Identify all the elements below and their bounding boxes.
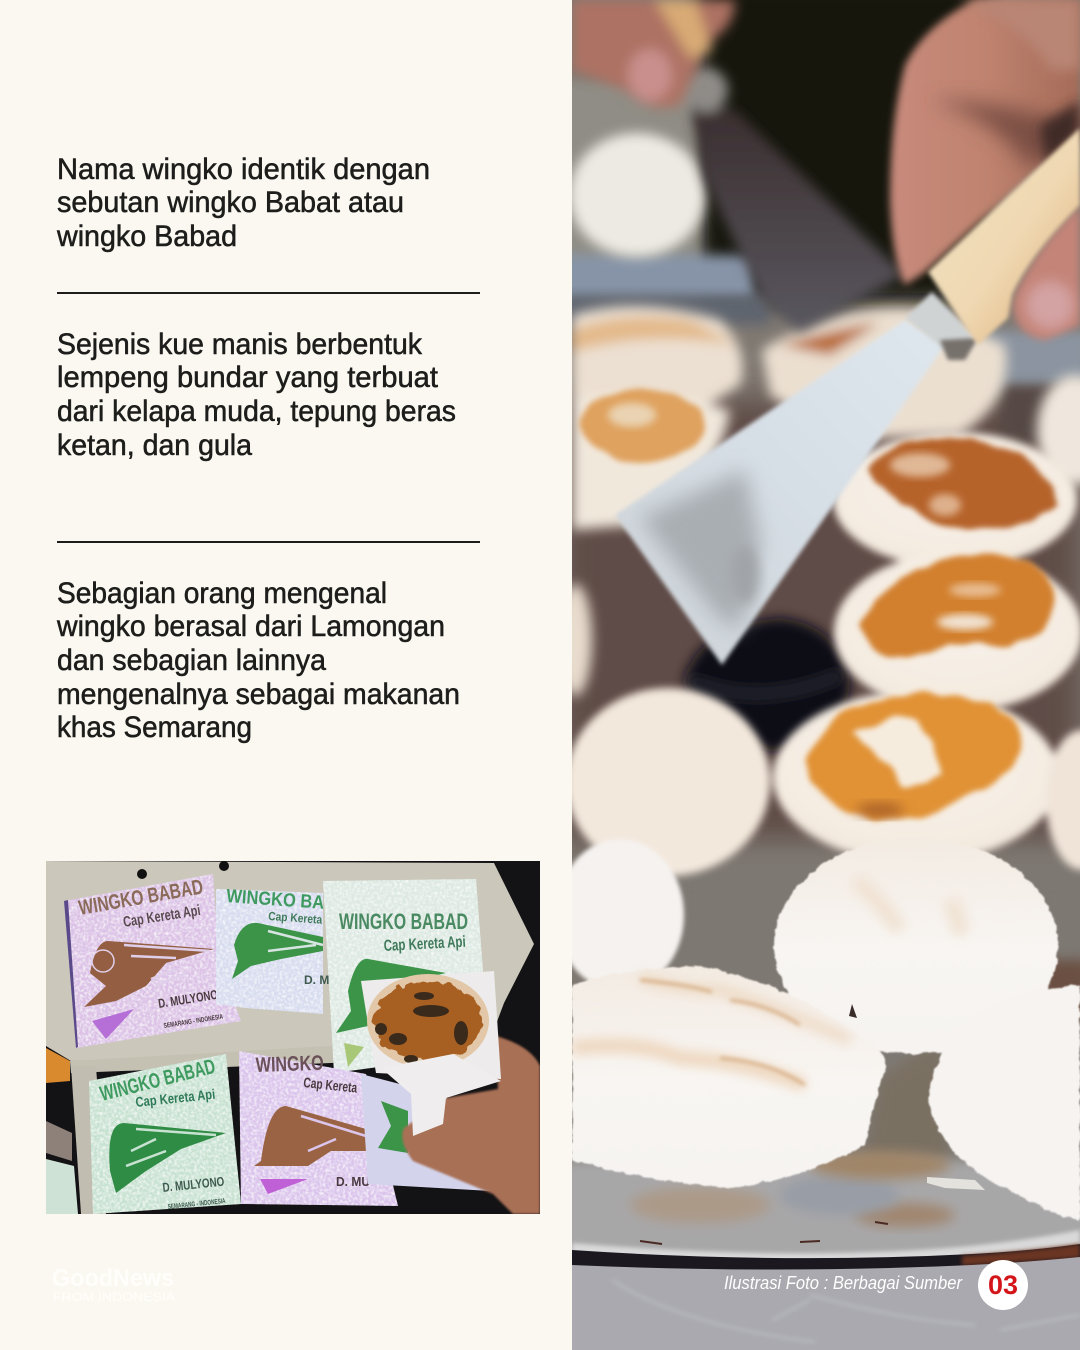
griddle background bbox=[560, 0, 1080, 1350]
packet purple top bbox=[64, 874, 241, 1048]
wrapped wingko held in hand bbox=[361, 971, 540, 1214]
text block: description bbox=[57, 328, 456, 462]
text block: wingko babat: Nama wingko identik dengan bbox=[57, 153, 430, 186]
packet green bottom: SEMARANG - INDONESIA bbox=[167, 1198, 226, 1211]
packet green bottom: WINGKO BABAD bbox=[98, 1055, 218, 1106]
box bbox=[46, 861, 540, 1214]
packet blue top: WINGKO BA bbox=[226, 886, 325, 914]
packet green bottom: Cap Kereta Api bbox=[135, 1086, 216, 1110]
packet green top: WINGKO BABAD bbox=[339, 909, 468, 934]
text block: description: Sejenis kue manis berbentuk bbox=[57, 328, 423, 361]
top right hand bbox=[890, 0, 1080, 340]
packet purple top: SEMARANG - INDONESIA bbox=[163, 1014, 224, 1030]
text block: origin: mengenalnya sebagai makanan bbox=[57, 678, 460, 711]
text block: description: dari kelapa muda, tepung beras bbox=[57, 395, 456, 428]
text block: origin: khas Semarang bbox=[57, 711, 252, 744]
text block: description: ketan, dan gula bbox=[57, 429, 252, 462]
text block: wingko babat: wingko Babad bbox=[56, 220, 237, 253]
packet purple top: D. MULYONO bbox=[157, 987, 219, 1011]
packet purple bottom bbox=[239, 1051, 398, 1206]
packet purple bottom: Cap Kereta bbox=[303, 1074, 358, 1096]
inset photo: wingko babad packages bbox=[46, 861, 540, 1214]
packet purple bottom: D. MU bbox=[336, 1174, 370, 1189]
mid cakes with crust bbox=[833, 432, 1080, 712]
packet blue top: Cap Kereta bbox=[268, 909, 323, 927]
logo: GoodNews from Indonesia: GoodNews bbox=[52, 1265, 174, 1292]
front spatula bbox=[615, 292, 978, 665]
top left hand bbox=[572, 0, 735, 108]
packet green bottom: D. MULYONO bbox=[162, 1174, 225, 1195]
packet green bottom bbox=[89, 1054, 241, 1214]
text block: origin: wingko berasal dari Lamongan bbox=[56, 610, 445, 643]
packet purple top: Cap Kereta Api bbox=[122, 902, 202, 931]
text block: origin: Sebagian orang mengenal bbox=[57, 577, 387, 610]
ink pot bbox=[684, 618, 850, 752]
packet blue top: D. M bbox=[304, 973, 329, 987]
main photo: wingko on griddle with spatula bbox=[572, 0, 1080, 1350]
text block: origin: dan sebagian lainnya bbox=[57, 644, 326, 677]
table surface bbox=[572, 1257, 1080, 1350]
blurred back cakes bbox=[558, 133, 1080, 696]
packet blue top bbox=[216, 886, 329, 1014]
front griddle cakes bbox=[556, 688, 1080, 1220]
packet green top: Cap Kereta Api bbox=[383, 934, 466, 955]
logo: GoodNews from Indonesia bbox=[52, 1265, 175, 1304]
text block: origin bbox=[56, 577, 460, 744]
spatula wooden handle bbox=[928, 128, 1080, 345]
packet purple top: WINGKO BABAD bbox=[77, 875, 205, 920]
orange crust on back cake bbox=[578, 389, 706, 461]
text block: wingko babat bbox=[56, 153, 430, 253]
packet blue bottom bbox=[361, 1074, 491, 1191]
page number badge bbox=[978, 1260, 1028, 1310]
packet purple bottom: WINGKO bbox=[255, 1052, 324, 1077]
back spatula bbox=[684, 68, 905, 332]
griddle metal foreground bbox=[540, 1151, 1080, 1270]
griddle rim bbox=[572, 1230, 1080, 1271]
packet green top bbox=[323, 879, 496, 1073]
text block: wingko babat: sebutan wingko Babat atau bbox=[57, 186, 404, 219]
text block: description: lempeng bundar yang terbuat bbox=[57, 361, 439, 394]
page number badge: 03 bbox=[988, 1270, 1018, 1300]
logo: GoodNews from Indonesia: FROM INDONESIA bbox=[53, 1290, 175, 1304]
